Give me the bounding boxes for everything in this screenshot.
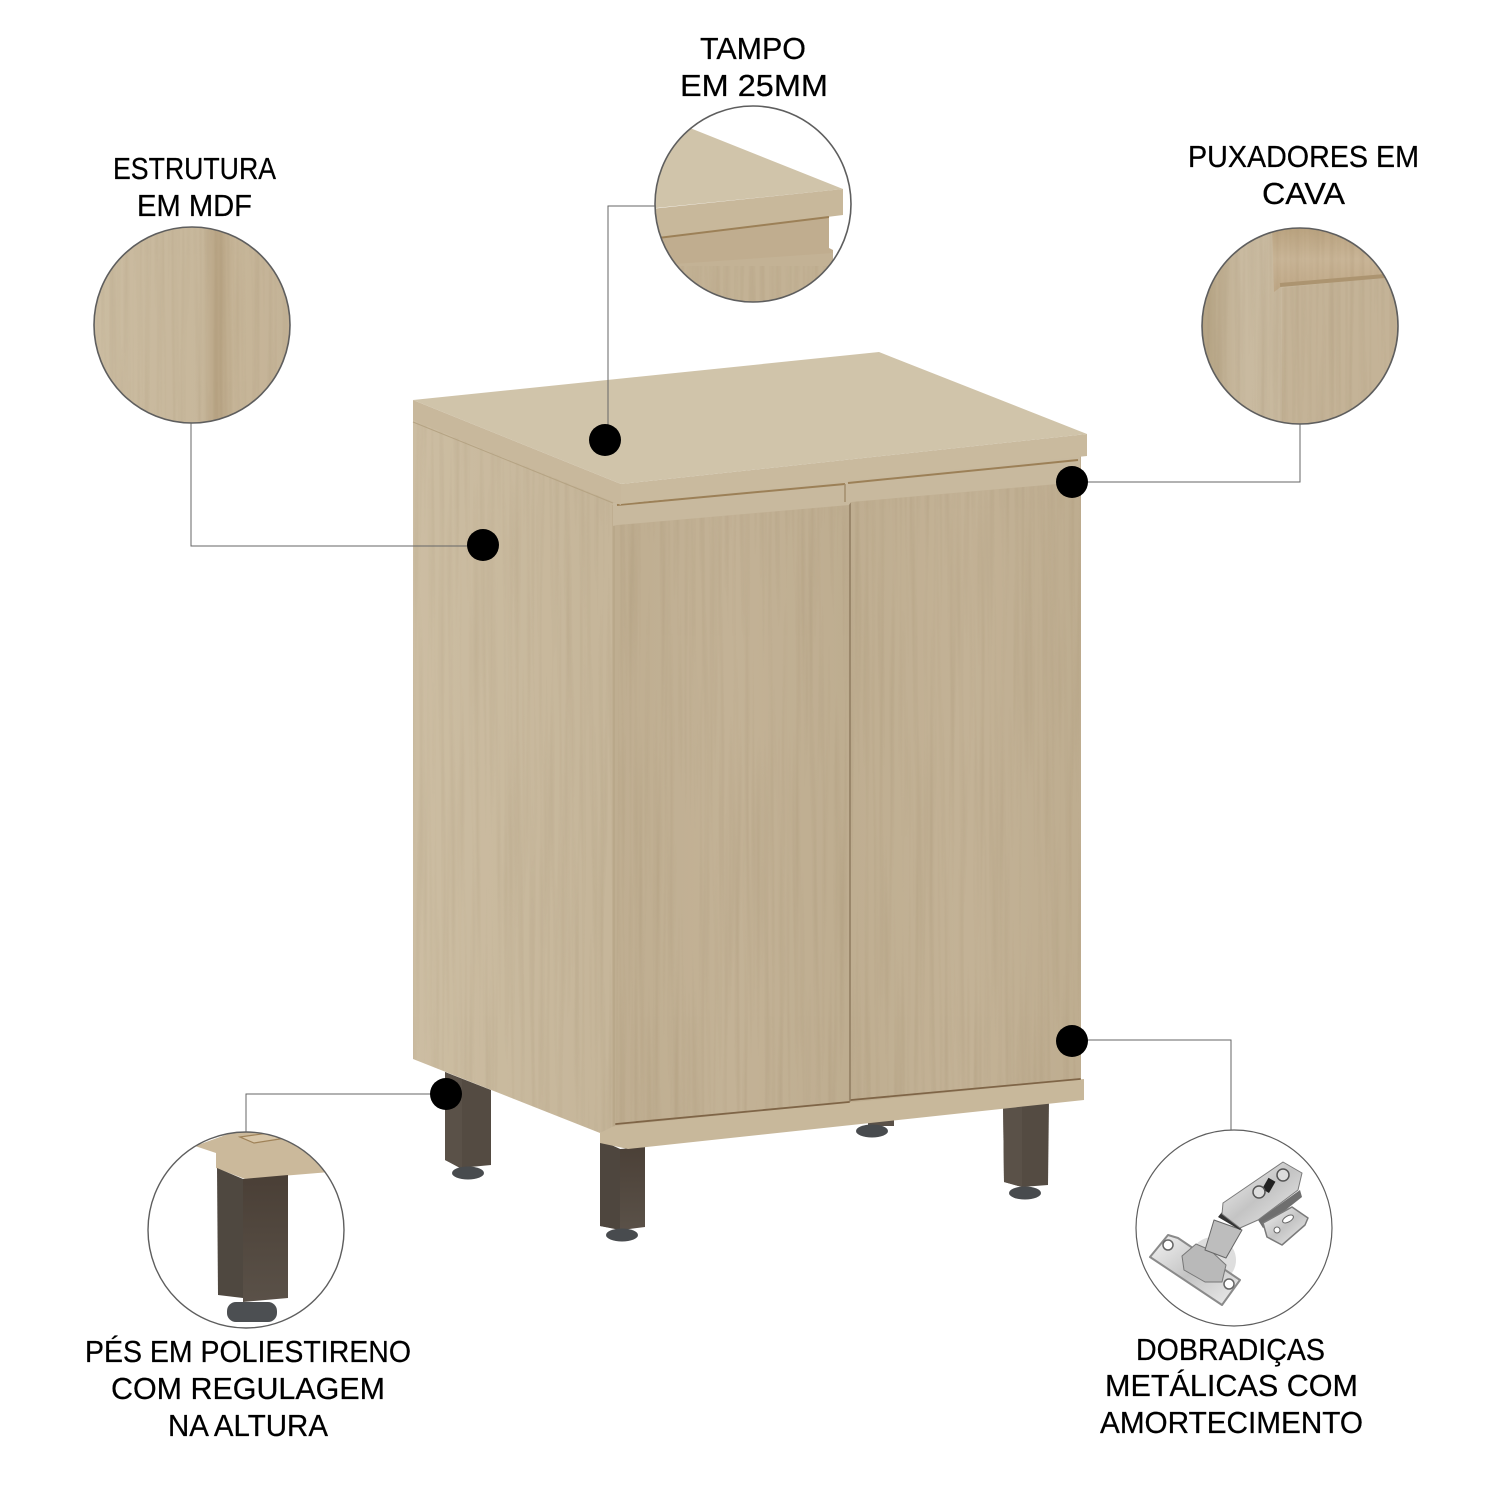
label: feet: PÉS EM POLIESTIRENO (85, 1334, 411, 1369)
marker dot: top (589, 424, 621, 456)
leader line: feet (246, 1094, 432, 1132)
left door (630, 544, 844, 974)
label: table top: TAMPO (700, 31, 806, 66)
label: structure (113, 151, 276, 223)
detail circle: foot (148, 1128, 344, 1328)
back left leg (445, 1072, 491, 1180)
marker dot: feet (430, 1078, 462, 1110)
marker dot: structure (467, 529, 499, 561)
middle rear foot (856, 1118, 894, 1138)
bottom rail (600, 1079, 1084, 1149)
label: structure: EM MDF (137, 188, 252, 223)
door gaps (614, 503, 1080, 1126)
back right leg (1003, 1100, 1049, 1200)
label: structure: ESTRUTURA (113, 151, 276, 186)
label: feet (85, 1334, 411, 1443)
marker dot: handles (1056, 466, 1088, 498)
leader line: structure (191, 423, 470, 546)
label: feet: NA ALTURA (168, 1408, 328, 1443)
leader line: handles (1085, 424, 1300, 482)
label: hinges: AMORTECIMENTO (1100, 1405, 1363, 1440)
table top: surface (413, 352, 1087, 484)
leader line: top (608, 206, 655, 430)
cabinet illustration (413, 352, 1087, 1242)
detail circle: recessed handles (1202, 226, 1400, 424)
label: handles: CAVA (1262, 176, 1345, 211)
side panel (413, 418, 625, 1140)
label: hinges: METÁLICAS COM (1105, 1368, 1358, 1403)
label: table top (680, 31, 828, 103)
hinge icon (1150, 1162, 1308, 1305)
recessed handle rail (613, 456, 1080, 526)
front backing (612, 456, 1081, 1130)
front leg (600, 1140, 645, 1242)
label: hinges: DOBRADIÇAS (1136, 1332, 1325, 1367)
label: hinges (1100, 1332, 1363, 1440)
leader line: hinges (1085, 1040, 1231, 1130)
label: handles: PUXADORES EM (1188, 139, 1419, 174)
label: table top: EM 25MM (680, 68, 828, 103)
detail circle: hinge (1136, 1130, 1332, 1326)
label: feet: COM REGULAGEM (111, 1371, 385, 1406)
marker dot: hinges (1056, 1025, 1088, 1057)
detail circle: MDF structure (94, 227, 290, 423)
right door (857, 558, 858, 563)
label: handles (1188, 139, 1419, 211)
table top: edges (413, 400, 1087, 505)
detail circle: table top 25mm (654, 105, 852, 303)
